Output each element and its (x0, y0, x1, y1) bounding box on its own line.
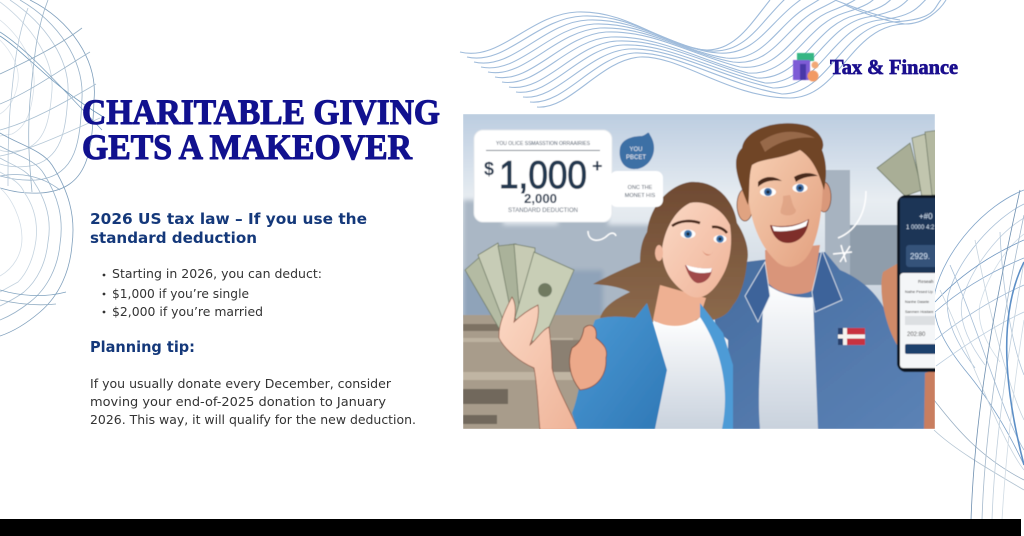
man ears (737, 189, 753, 221)
background city and street (463, 114, 935, 429)
white tag: MONET HIS (625, 193, 656, 199)
deduction card: 2,000 (524, 192, 557, 206)
phone: +#0 (919, 212, 933, 221)
man collar (745, 250, 842, 322)
man eyes (760, 184, 808, 196)
logo wordmark: Tax & Finance (830, 55, 958, 79)
speech bubble (620, 133, 654, 169)
title (82, 92, 440, 167)
man eyebrows (758, 173, 818, 187)
deduction card: + (592, 156, 603, 176)
speech bubble: PBCET (626, 155, 646, 161)
decorative wave: top centre (460, 0, 948, 107)
woman face (662, 202, 731, 298)
man forearm sliver (924, 370, 935, 429)
phone: Nathe Pesed Up (905, 290, 933, 294)
bullet list: $2,000 if you’re married (112, 304, 263, 319)
heading: standard deduction: standard deduction (90, 229, 257, 247)
money fan left (465, 243, 574, 350)
woman smile (685, 265, 712, 283)
woman hair back (593, 182, 748, 322)
woman t-shirt (653, 317, 728, 429)
man smile (770, 219, 809, 243)
decorative mesh: lower-left (0, 133, 73, 336)
phone: 202:80 (907, 332, 926, 338)
deduction card: 1,000 (499, 154, 587, 197)
deduction card: $ (484, 159, 494, 179)
phone: 1 0000 4:2 (906, 225, 935, 231)
phone: Sanmen Hostare (905, 310, 934, 314)
logo icon (793, 53, 818, 82)
sparkles (588, 191, 866, 262)
deduction card: YOU OLICE SSMASSTION ORRAAIRIES (496, 141, 591, 147)
man face (747, 142, 823, 267)
heading: standard deduction (90, 210, 367, 247)
woman ear (655, 245, 663, 261)
bottom black bar (0, 519, 1021, 536)
deduction card: STANDARD DEDUCTION (508, 208, 578, 214)
phone (896, 194, 935, 373)
money fan right (877, 130, 940, 198)
title: CHARITABLE GIVING (82, 92, 440, 132)
flag badge (838, 328, 865, 345)
woman denim shirt right panel (700, 303, 733, 429)
planning tip paragraph: If you usually donate every December, consider (90, 376, 392, 391)
woman neck (653, 285, 706, 326)
deduction card (474, 130, 612, 222)
planning tip paragraph: moving your end-of-2025 donation to January (90, 394, 387, 409)
planning tip paragraph (90, 376, 416, 427)
heading: standard deduction: 2026 US tax law – If you use the (90, 210, 367, 228)
man shirt (712, 252, 935, 429)
woman arm and hand with money (499, 297, 578, 430)
decorative mesh: top-left (0, 0, 105, 193)
heading: planning tip: Planning tip: (90, 338, 195, 356)
decorative mesh: right side (934, 190, 1024, 520)
illustration: couple with money (463, 114, 960, 430)
man figure (712, 123, 935, 429)
bullet list: Starting in 2026, you can deduct: (112, 266, 322, 281)
man t-shirt (759, 280, 818, 429)
title: GETS A MAKEOVER (82, 127, 413, 167)
phone: Nanhe Dasele (905, 300, 929, 304)
man neck (765, 245, 820, 294)
woman eyes (672, 221, 727, 243)
phone: 2929. (910, 252, 930, 261)
woman denim shirt (572, 303, 667, 429)
white tag (610, 171, 663, 207)
logo (793, 53, 958, 82)
man nose (781, 195, 796, 215)
planning tip paragraph: 2026. This way, it will qualify for the new deduction. (90, 412, 416, 427)
bullet list (103, 266, 322, 319)
white tag: ONC THE (628, 185, 653, 191)
woman nose (702, 252, 710, 256)
man's hand on her shoulder (570, 325, 607, 390)
phone: Reseah (918, 279, 934, 284)
speech bubble: YOU (629, 147, 643, 153)
man hair (736, 123, 826, 205)
man arm raised (880, 264, 898, 346)
bullet list: $1,000 if you’re single (112, 286, 249, 301)
